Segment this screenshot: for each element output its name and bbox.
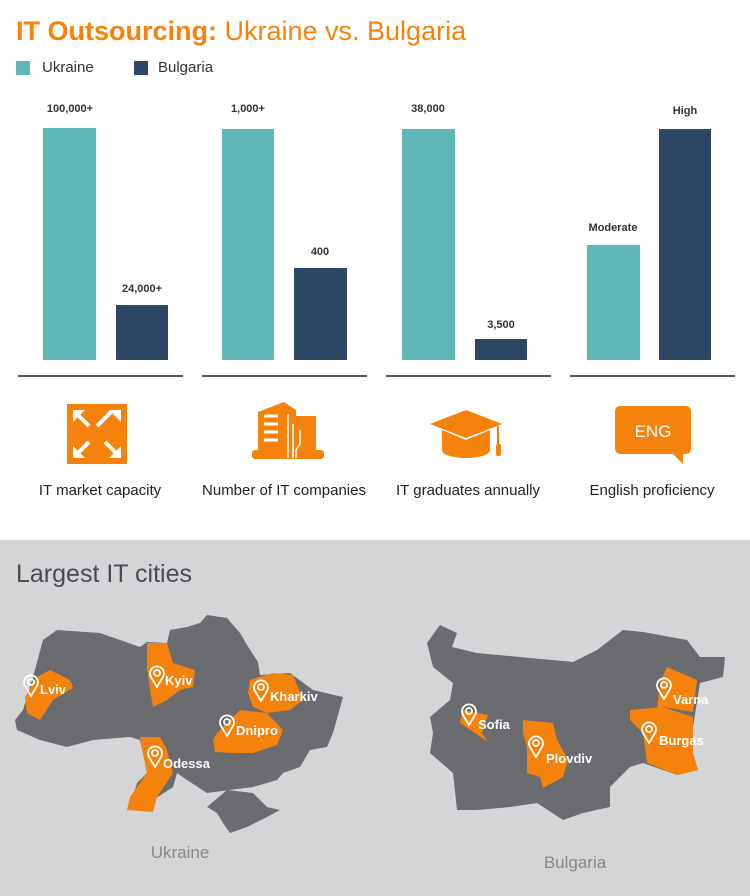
bar chart: High <box>673 105 697 117</box>
legend: Ukraine <box>42 59 94 76</box>
icon: expand <box>67 404 127 464</box>
map: Ukraine: Dnipro <box>236 723 278 738</box>
map: Ukraine: Ukraine <box>151 843 209 862</box>
map: Bulgaria: Bulgaria <box>544 853 607 872</box>
icon: speech bubble ENG: ENG <box>635 422 671 441</box>
bar chart: 400 <box>311 246 329 258</box>
map: Bulgaria <box>427 625 725 872</box>
title: IT Outsourcing: Ukraine vs. Bulgaria <box>16 16 466 46</box>
bar chart: 100,000+ <box>47 103 93 115</box>
bar chart <box>18 103 735 377</box>
text: Number of IT companies <box>202 482 366 499</box>
bar chart: 3,500 <box>487 319 515 331</box>
map: Bulgaria: Varna <box>673 692 709 707</box>
legend <box>16 59 214 76</box>
bar chart: 1,000+ <box>231 103 265 115</box>
map: Ukraine: Lviv <box>40 682 67 697</box>
map: Ukraine: Odessa <box>163 756 211 771</box>
map: Ukraine <box>15 615 343 862</box>
legend: Bulgaria <box>158 59 213 76</box>
map: Bulgaria: Burgas <box>659 733 704 748</box>
labels: IT market capacity <box>39 482 161 499</box>
icon: building <box>252 402 324 459</box>
map: Ukraine: Kyiv <box>165 673 193 688</box>
bar chart: 38,000 <box>411 103 445 115</box>
bar chart: Moderate <box>589 222 637 234</box>
bar chart: 24,000+ <box>122 283 162 295</box>
text: English proficiency <box>589 482 715 499</box>
icon: graduation cap <box>430 410 502 458</box>
map: Bulgaria: Plovdiv <box>546 751 593 766</box>
map: Ukraine: Kharkiv <box>270 689 318 704</box>
text: IT graduates annually <box>396 482 540 499</box>
map: Bulgaria: Sofia <box>478 717 511 732</box>
icon: speech bubble ENG <box>615 406 691 464</box>
heading: Largest IT cities <box>16 560 192 588</box>
panel: largest IT cities <box>0 540 750 896</box>
